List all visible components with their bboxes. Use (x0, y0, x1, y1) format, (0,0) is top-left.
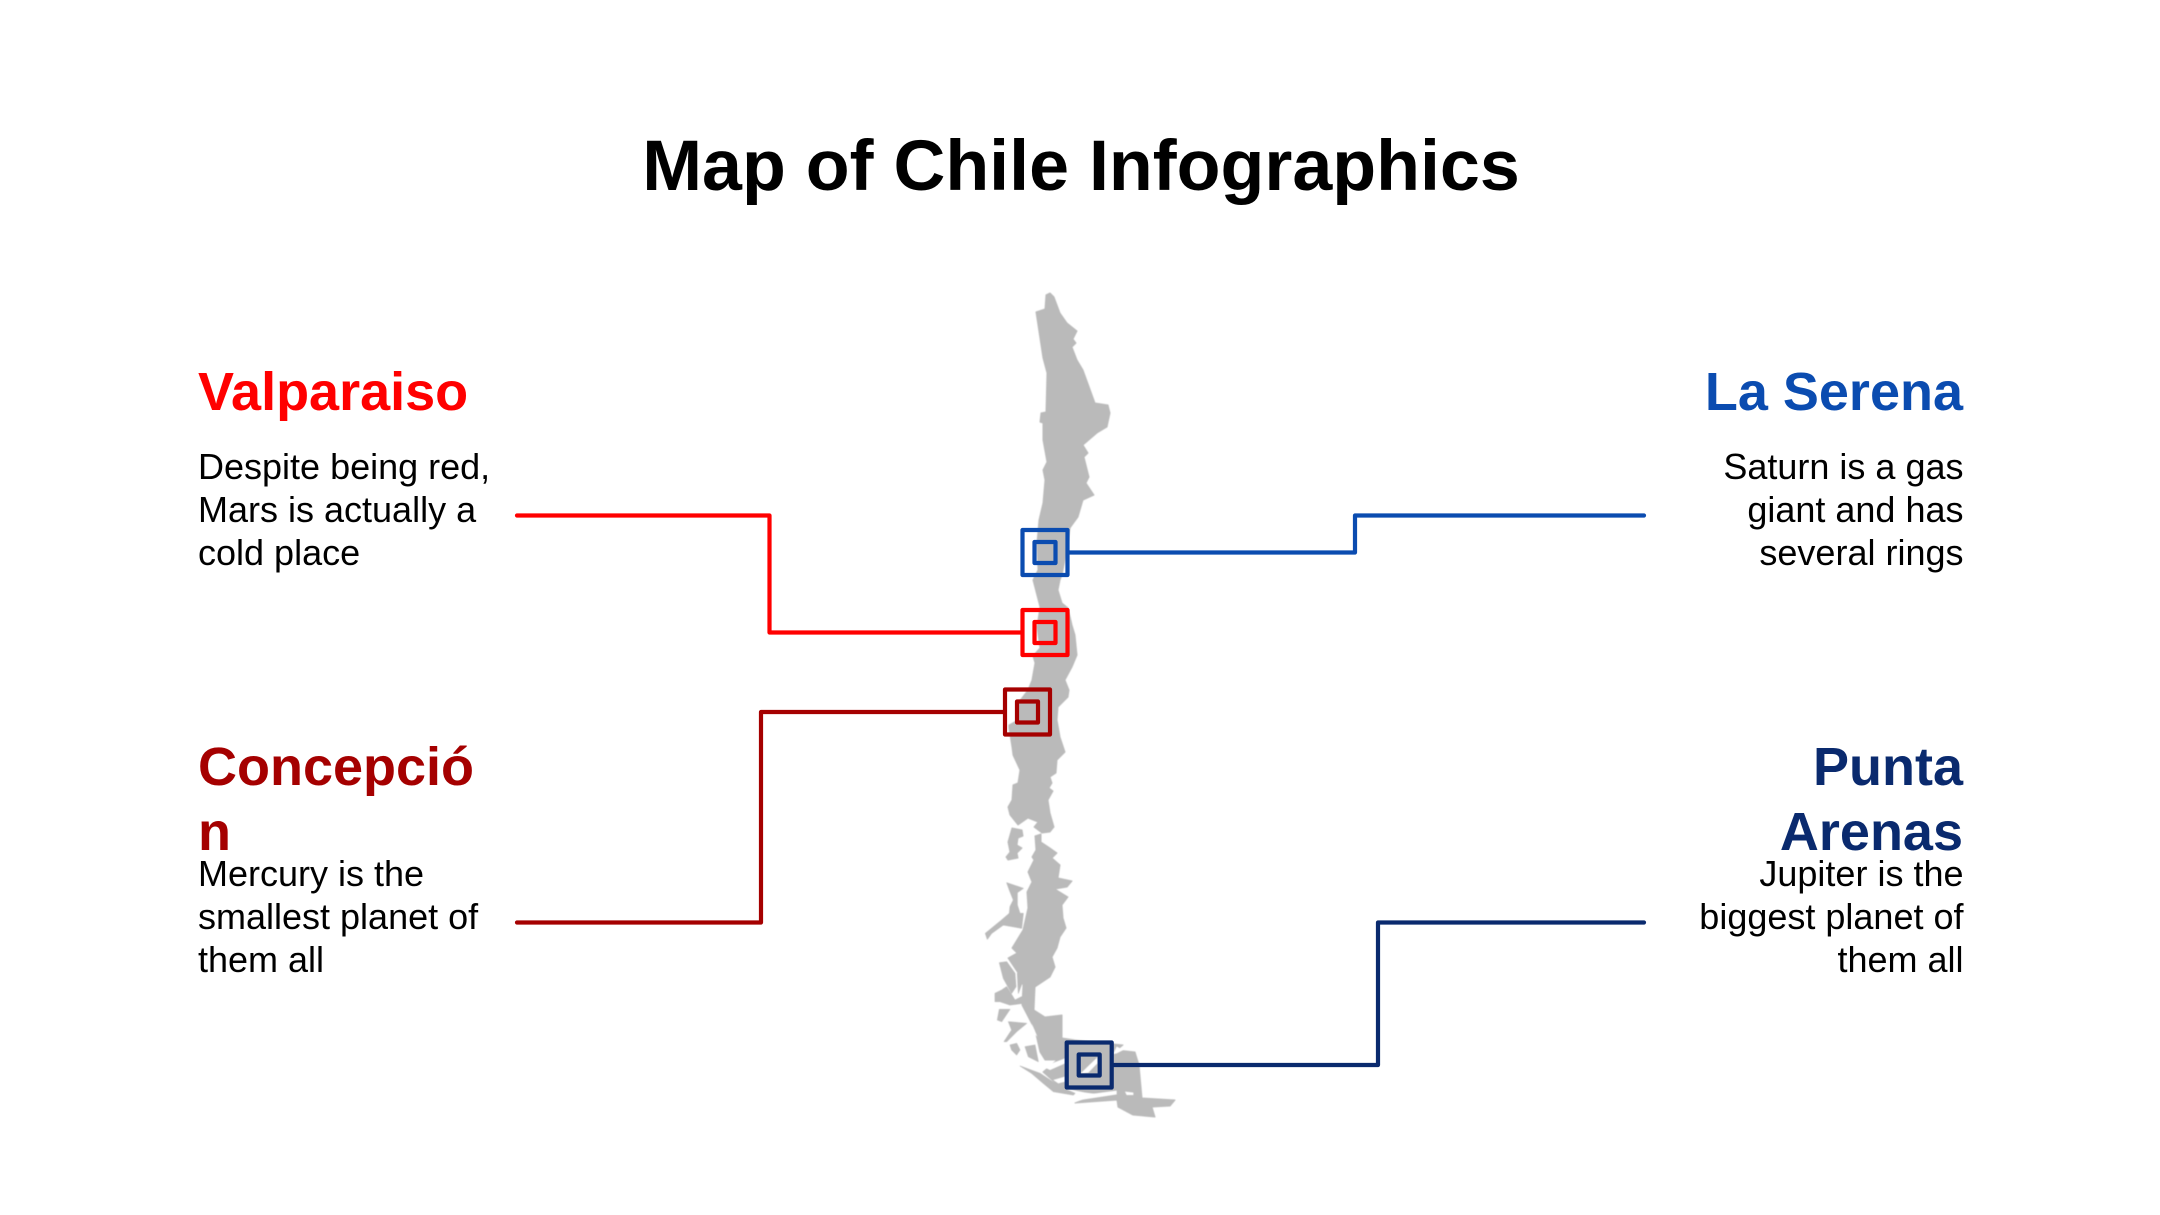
text: Valparaiso description: cold place (198, 532, 360, 573)
text: La Serena description: several rings (1759, 532, 1964, 573)
connector: Valparaiso (517, 516, 1021, 632)
text: Valparaiso description: Despite being red, (198, 446, 490, 487)
text: Valparaiso description: Mars is actually a (198, 489, 477, 530)
callout: Punta Arenas (1699, 737, 1964, 980)
text: La Serena description: Saturn is a gas (1723, 446, 1964, 487)
text: Punta Arenas description: Jupiter is the (1759, 853, 1964, 894)
marker: Concepción (1005, 690, 1050, 734)
text: Concepción description: them all (198, 939, 324, 980)
marker: Valparaiso (1022, 610, 1068, 655)
map of Chile (985, 293, 1175, 1117)
heading: Concepción: Concepció (198, 737, 474, 797)
callout: Concepción (198, 737, 479, 980)
heading: Concepción: n (198, 802, 231, 862)
text: Punta Arenas description: biggest planet of (1699, 896, 1964, 937)
callout: La Serena (1705, 362, 1964, 573)
heading: Punta Arenas: Punta (1813, 737, 1964, 797)
text: Concepción description: smallest planet of (198, 896, 479, 937)
heading: La Serena: La Serena (1705, 362, 1964, 422)
marker: Punta Arenas (1067, 1042, 1112, 1088)
connector: Punta Arenas (1113, 922, 1644, 1065)
marker: La Serena (1022, 530, 1068, 575)
text: Concepción description: Mercury is the (198, 853, 424, 894)
text: Punta Arenas description: them all (1837, 939, 1964, 980)
heading: Valparaiso: Valparaiso (198, 362, 468, 422)
heading: Punta Arenas: Arenas (1780, 802, 1963, 862)
title: Map of Chile Infographics (642, 126, 1520, 206)
connector: Concepción (517, 712, 1004, 922)
text: La Serena description: giant and has (1747, 489, 1964, 530)
connector: La Serena (1069, 516, 1644, 552)
callout: Valparaiso (198, 362, 490, 573)
